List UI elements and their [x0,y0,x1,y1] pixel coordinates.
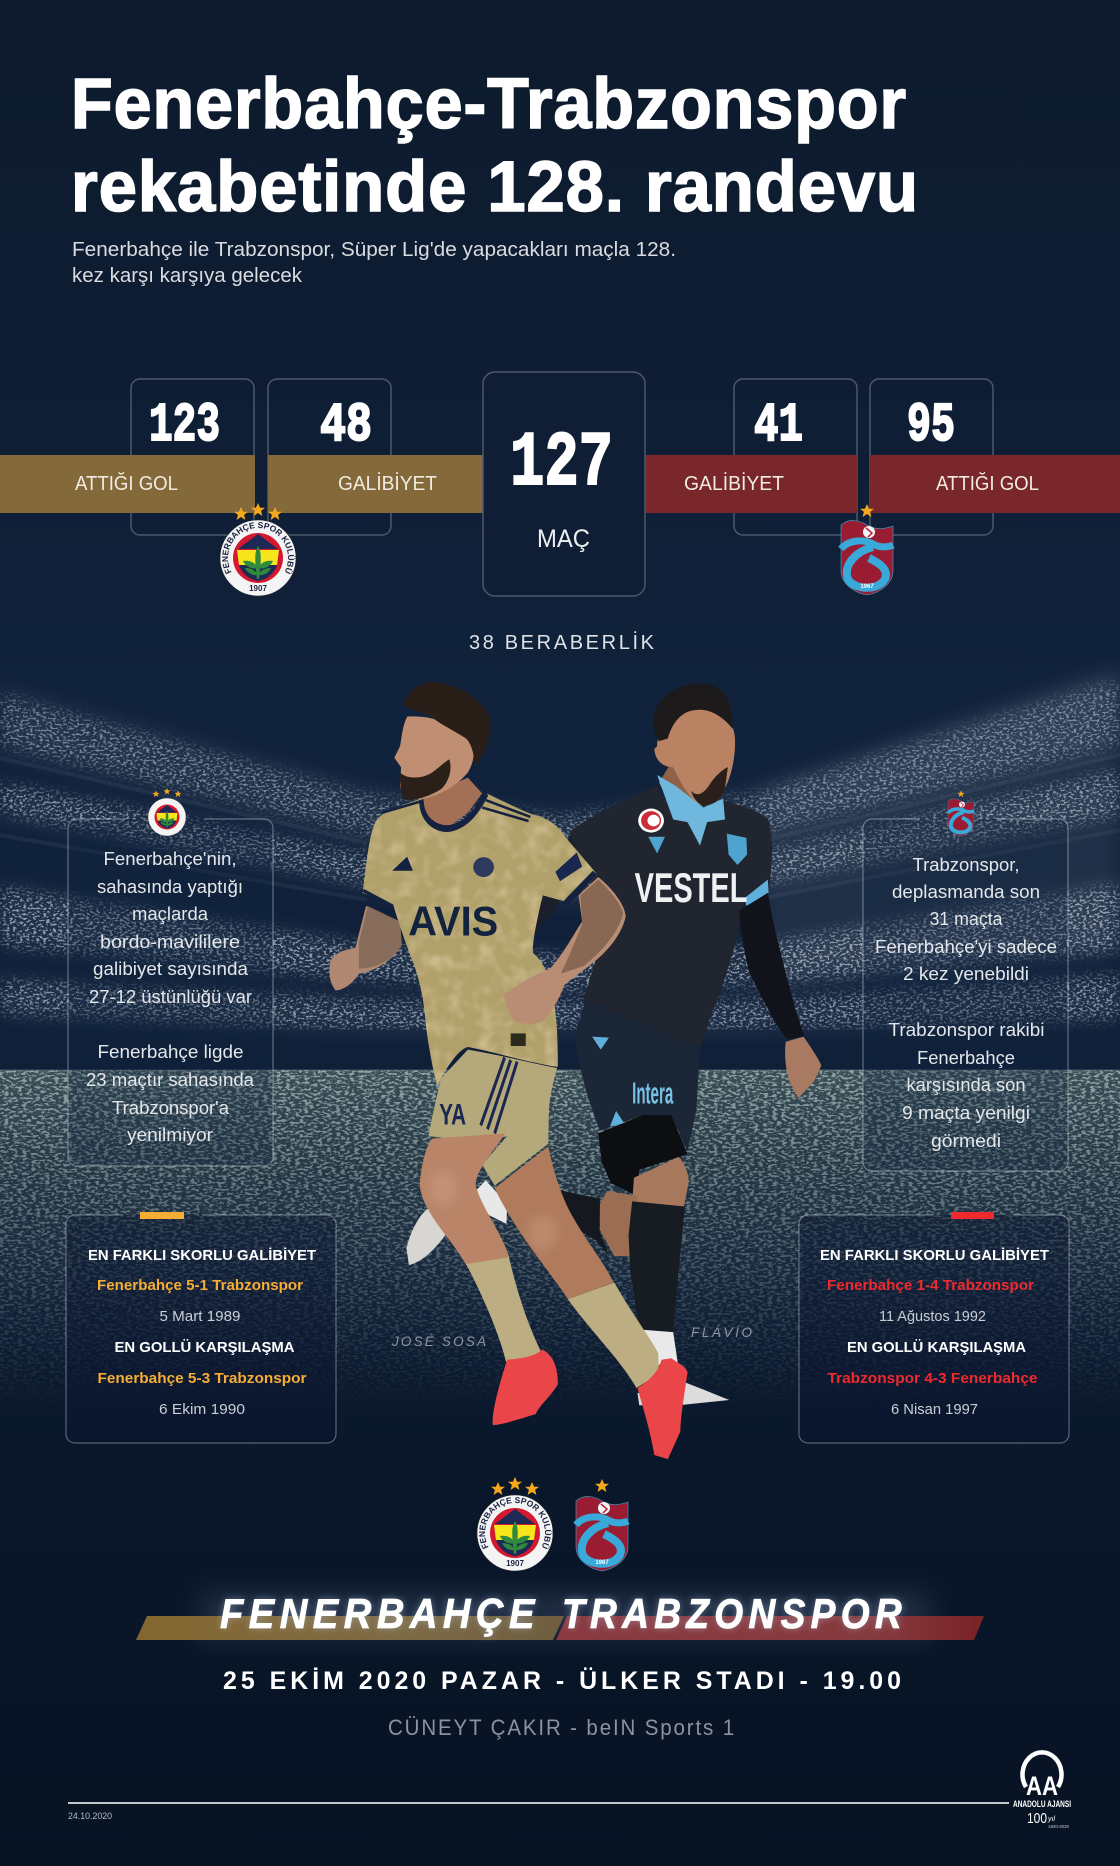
facts text: Trabzonspor'a [112,1098,230,1118]
white sock [639,1329,678,1382]
icon: Fenerbahçe crest bottom: 1907 [506,1559,524,1568]
sleeve cuff [745,880,769,906]
facts text [86,849,255,1145]
team names: TRABZONSPOR [562,1590,907,1637]
subtitle: Fenerbahçe ile Trabzonspor, Süper Lig'de yapacakları maçla 128. [72,238,676,261]
kit maker logo [648,837,665,854]
back leg and white boot [406,1180,609,1265]
caption: José Sosa: JOSÉ SOSA [391,1334,486,1349]
facts text: yenilmiyor [127,1125,213,1145]
sleeve cuffs [361,871,597,910]
roof streak lines [0,755,1120,900]
Trabzonspor wins stat: GALİBİYET [684,472,784,495]
jersey patch [511,1033,526,1046]
icon: small Trabzonspor crest [948,790,974,836]
gold stat bar [0,455,483,513]
red stat bar [645,455,1120,513]
Fenerbahçe wins stat: GALİBİYET [338,472,437,495]
facts text: 23 maçtır sahasında [86,1070,255,1090]
most goals date: 6 Nisan 1997 [891,1401,978,1418]
matches label: MAÇ [537,525,590,553]
banner glow [200,1592,930,1640]
Fenerbahçe goals stat: 123 [149,394,220,457]
Fenerbahçe wins stat: 48 [320,394,372,457]
sponsor AVIS: AVIS [408,898,498,945]
facts text: galibiyet sayısında [93,959,249,979]
shorts sponsor: YA [439,1099,466,1131]
facts text: karşısında son [906,1075,1026,1095]
biggest win heading: EN FARKLI SKORLU GALİBİYET [820,1247,1049,1264]
icon: Trabzonspor crest bottom: 1967 [595,1560,609,1566]
shorts [575,1000,700,1152]
long black sleeve [739,893,804,1039]
icon: Trabzonspor crest bottom [576,1479,628,1571]
facts text [875,855,1057,1151]
title: rekabetinde 128. randevu [71,148,919,227]
most goals score: Fenerbahçe 5-3 Trabzonspor [98,1370,307,1387]
collar [657,775,725,846]
red boots [493,1349,687,1459]
facts text: Fenerbahçe ligde [98,1042,244,1062]
most goals date: 6 Ekim 1990 [159,1401,245,1418]
icon: Fenerbahçe crest top [220,503,296,596]
logo: Anadolu Ajansı: yıl [1047,1816,1055,1823]
biggest win date: 11 Ağustos 1992 [879,1308,986,1325]
facts text: maçlarda [132,904,209,924]
Trabzonspor goals stat [907,394,1039,495]
total matches number: 127 [510,421,613,508]
facts text: Fenerbahçe'nin, [104,849,236,869]
head [654,708,735,806]
facts text: Trabzonspor, [912,855,1020,875]
jersey [570,786,772,1050]
caption: Flávio: FLÁVÍO [691,1325,752,1340]
panel: Trabzonspor facts [863,790,1068,1171]
shorts [429,1050,557,1186]
rear leg [495,1146,614,1299]
Fenerbahçe goals stat: ATTIĞI GOL [75,472,178,495]
referee and broadcaster: CÜNEYT ÇAKIR - beIN Sports 1 [388,1715,736,1740]
Trabzonspor goals stat: 95 [907,394,955,457]
back knee [600,1191,637,1256]
crowd speckle [0,680,1120,1030]
neck [659,762,700,820]
Fenerbahçe wins stat [320,394,437,495]
club emblem [727,834,747,865]
beard [400,759,451,800]
most goals heading: EN GOLLÜ KARŞILAŞMA [114,1339,295,1356]
logo: Anadolu Ajansı: 100 [1027,1810,1047,1827]
leg highlights [429,1170,559,1250]
grass base [0,1070,1120,1410]
date stamp: 24.10.2020 [68,1811,112,1821]
icon: Fenerbahçe crest bottom [476,1477,554,1572]
title [71,65,919,227]
sock [629,1201,685,1332]
shorts accent [610,1111,624,1127]
under shorts [598,1115,687,1196]
panel: Trabzonspor records [799,1212,1069,1443]
facts text: 9 maçta yenilgi [902,1103,1030,1123]
match banner [136,1590,984,1640]
player: José Sosa [329,682,687,1459]
stadium haze [0,670,1120,1032]
sponsor VESTEL: VESTEL [635,865,747,911]
team names: FENERBAHÇE [220,1590,540,1637]
panel: Fenerbahçe records [66,1212,336,1443]
shorts stripes [481,1057,517,1133]
icon: small Fenerbahçe crest [148,788,186,836]
shoulder stripes [382,800,530,821]
accent bar [140,1212,184,1219]
hair [403,682,490,767]
neck [423,778,482,833]
hand [785,1037,821,1098]
player: Flávio [406,683,821,1405]
facts text: bordo-mavililere [100,932,240,952]
Trabzonspor wins stat: 41 [754,394,803,457]
jersey [362,793,597,1086]
crescent badge [638,809,664,833]
boot [637,1379,729,1405]
facts text: 2 kez yenebildi [903,964,1029,984]
red slant bar [556,1616,984,1640]
facts text: deplasmanda son [892,882,1040,902]
subtitle: kez karşı karşıya gelecek [72,264,303,287]
footer line [68,1802,1009,1804]
facts text: Trabzonspor rakibi [888,1020,1044,1040]
facts text: 27-12 üstünlüğü var [89,987,252,1007]
icon: Trabzonspor crest top: 1967 [860,584,874,590]
biggest win heading: EN FARKLI SKORLU GALİBİYET [88,1247,316,1264]
left arm [329,906,402,991]
title: Fenerbahçe-Trabzonspor [71,65,907,144]
logo: Anadolu Ajansı: 1920-2020 [1048,1824,1069,1829]
most goals heading: EN GOLLÜ KARŞILAŞMA [847,1339,1026,1356]
subtitle [72,238,676,287]
right arm [504,877,626,1024]
armband [555,852,582,881]
facts text: Fenerbahçe'yi sadece [875,937,1057,957]
logo: Anadolu Ajansı [1013,1752,1071,1829]
pitch edge highlight [0,1069,1120,1072]
Fenerbahçe goals stat [75,394,220,495]
icon: Fenerbahçe crest bottom: FENERBAHÇE SPOR KULÜBÜ [479,1497,552,1550]
tattoo left [359,906,402,969]
facts text: sahasında yaptığı [97,877,243,897]
hair [653,683,733,741]
icon: Fenerbahçe crest top: 1907 [249,584,267,593]
biggest win score: Fenerbahçe 1-4 Trabzonspor [827,1277,1034,1294]
facts text: Fenerbahçe [917,1048,1015,1068]
logo: Anadolu Ajansı: AA [1026,1771,1058,1801]
adidas logo [392,857,413,871]
center total matches box [483,372,645,596]
stadium background [0,670,1120,1410]
match date and venue: 25 EKİM 2020 PAZAR - ÜLKER STADI - 19.00 [223,1666,905,1695]
grass texture [0,1070,1120,1410]
beard [691,767,728,806]
front leg [420,1133,510,1265]
thigh [632,1157,689,1207]
facts text: görmedi [931,1131,1001,1151]
gold slant bar [136,1616,564,1640]
stat boxes outlines [131,379,993,535]
logo: Anadolu Ajansı: ANADOLU AJANSI [1013,1799,1071,1809]
biggest win score: Fenerbahçe 5-1 Trabzonspor [97,1277,303,1294]
facts text: 31 maçta [930,909,1003,929]
right side brighter haze [760,670,1120,985]
collar [421,793,486,829]
icon: Trabzonspor crest top [841,504,893,595]
accent bar [951,1212,994,1219]
Trabzonspor goals stat: ATTIĞI GOL [936,472,1039,495]
draws count: 38 BERABERLİK [469,631,655,654]
arm behind [529,833,582,937]
shorts logo [592,1037,609,1050]
icon: Fenerbahçe crest top: FENERBAHÇE SPOR KULÜBÜ [222,522,296,574]
head [394,716,474,799]
tattoo right [561,880,623,974]
shorts sponsor: Intera [632,1075,674,1111]
Trabzonspor wins stat [684,394,803,495]
club crest on jersey [473,857,494,877]
socks [466,1257,659,1388]
panel: Fenerbahçe facts [68,788,273,1166]
team names [220,1590,907,1637]
most goals score: Trabzonspor 4-3 Fenerbahçe [828,1370,1038,1387]
biggest win date: 5 Mart 1989 [160,1308,240,1325]
